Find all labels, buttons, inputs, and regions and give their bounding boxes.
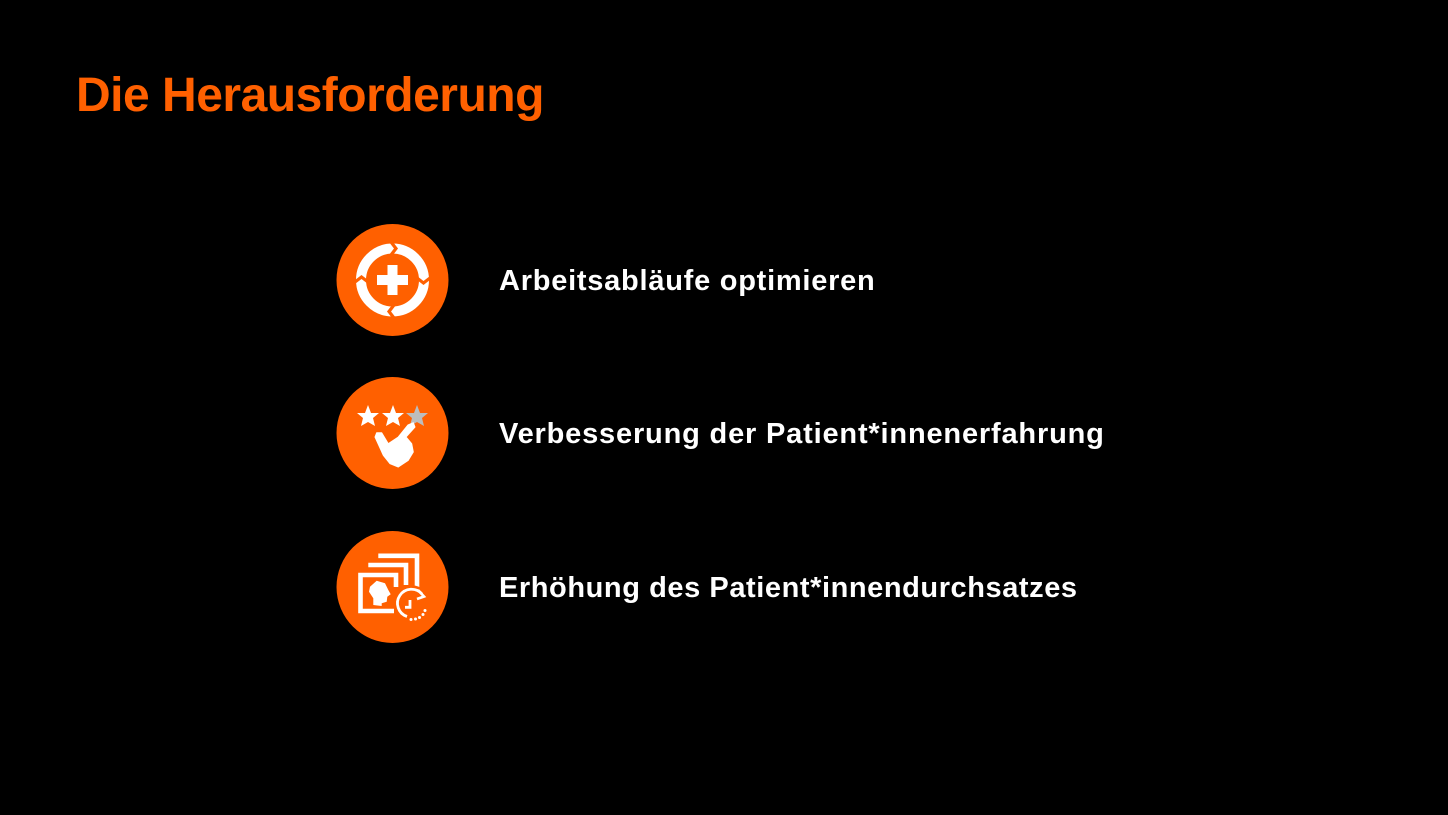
icon: circular workflow with medical cross [336, 224, 448, 336]
title: Die Herausforderung [76, 69, 544, 122]
text: item 1: Arbeitsabläufe optimieren [499, 265, 876, 297]
icon: stacked images with head and clock [336, 531, 448, 643]
text: item 2: Verbesserung der Patient*innenerfahrung [499, 418, 1105, 450]
text: item 3: Erhöhung des Patient*innendurchsatzes [499, 572, 1078, 604]
icon: star rating with pointing hand [336, 377, 448, 489]
